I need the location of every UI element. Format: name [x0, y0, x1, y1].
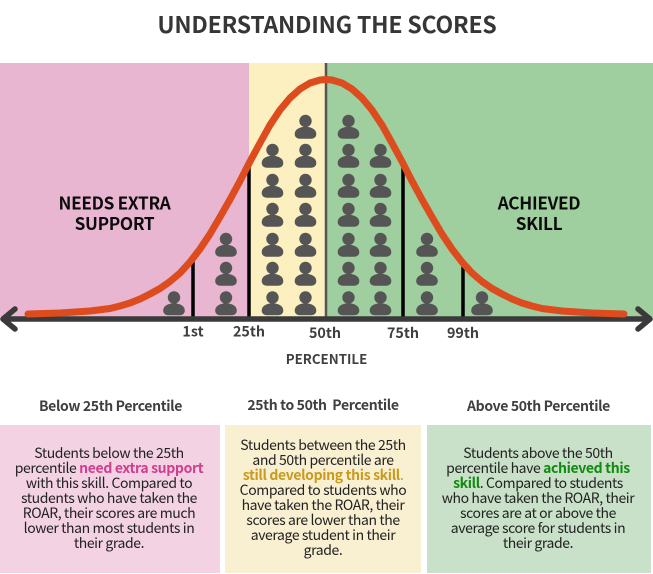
- percentile labels: 50th: [309, 322, 341, 343]
- zone label: needs extra support: NEEDS EXTRA: [59, 190, 172, 214]
- heading: above 50th: Above 50th Percentile: [467, 396, 610, 416]
- panel: above 50th description: who have taken the ROAR, their: [442, 488, 634, 508]
- panel: 25th to 50th description: Compared to students who: [240, 480, 406, 500]
- panel: above 50th description: skill. Compared to students: [453, 473, 623, 493]
- bell curve chart: [0, 63, 653, 368]
- heading: below 25th: Below 25th Percentile: [39, 396, 182, 416]
- panel: above 50th description: their grade.: [503, 533, 573, 553]
- median line: [325, 63, 327, 317]
- percentile labels: [182, 320, 479, 343]
- percentile labels: 25th: [233, 320, 265, 342]
- panel: below 25th description: with this skill. Compared to: [26, 473, 192, 493]
- percentile marker lines: [193, 165, 463, 317]
- panel: below 25th description: Students below the 25th: [34, 443, 184, 463]
- panel: below 25th description: [0, 425, 220, 573]
- student icons: [163, 115, 493, 315]
- panel: still developing zone: [249, 63, 326, 317]
- panel: above 50th description: scores are at or above the: [460, 503, 616, 523]
- panel: below 25th description: students who have taken the: [21, 488, 197, 508]
- panel: 25th to 50th description: average student in their: [251, 525, 395, 545]
- panel: below 25th description: percentile need extra support: [15, 458, 203, 478]
- panel: achieved skill zone: [326, 63, 653, 317]
- zone label: achieved skill: SKILL: [516, 210, 563, 235]
- panel: above 50th description: average score for students in: [451, 518, 625, 538]
- axis title: PERCENTILE: [286, 349, 367, 368]
- panel: 25th to 50th description: scores are lower than the: [246, 510, 400, 530]
- panel: 25th to 50th description: still developing this skill.: [243, 465, 403, 485]
- panel: 25th to 50th description: [225, 425, 421, 573]
- percentile labels: 75th: [387, 322, 419, 343]
- panel: 25th to 50th description: and 50th percentile are: [252, 450, 394, 470]
- zone label: needs extra support: SUPPORT: [75, 210, 155, 235]
- panel: below 25th description: their grade.: [74, 533, 144, 553]
- panel: above 50th description: [427, 425, 651, 573]
- title: UNDERSTANDING THE SCORES: [157, 6, 497, 40]
- zone label: achieved skill: ACHIEVED: [497, 190, 580, 214]
- panel: above 50th description: Students above the 50th: [463, 443, 613, 463]
- horizontal axis with arrows: [3, 309, 650, 329]
- panel: below 25th description: ROAR, their scores are much: [23, 503, 195, 523]
- panel: 25th to 50th description: Students between the 25th: [240, 435, 406, 455]
- panel: above 50th description: percentile have achieved this: [446, 458, 630, 478]
- percentile labels: 1st: [182, 320, 204, 342]
- bell curve: [28, 80, 624, 314]
- percentile labels: 99th: [447, 322, 479, 343]
- heading: 25th to 50th: 25th to 50th Percentile: [247, 395, 399, 415]
- panel: 25th to 50th description: have taken the ROAR, their: [242, 495, 404, 515]
- panel: 25th to 50th description: grade.: [304, 540, 342, 560]
- panel: below 25th description: lower than most students in: [24, 518, 194, 538]
- panel: needs extra support zone: [0, 63, 249, 317]
